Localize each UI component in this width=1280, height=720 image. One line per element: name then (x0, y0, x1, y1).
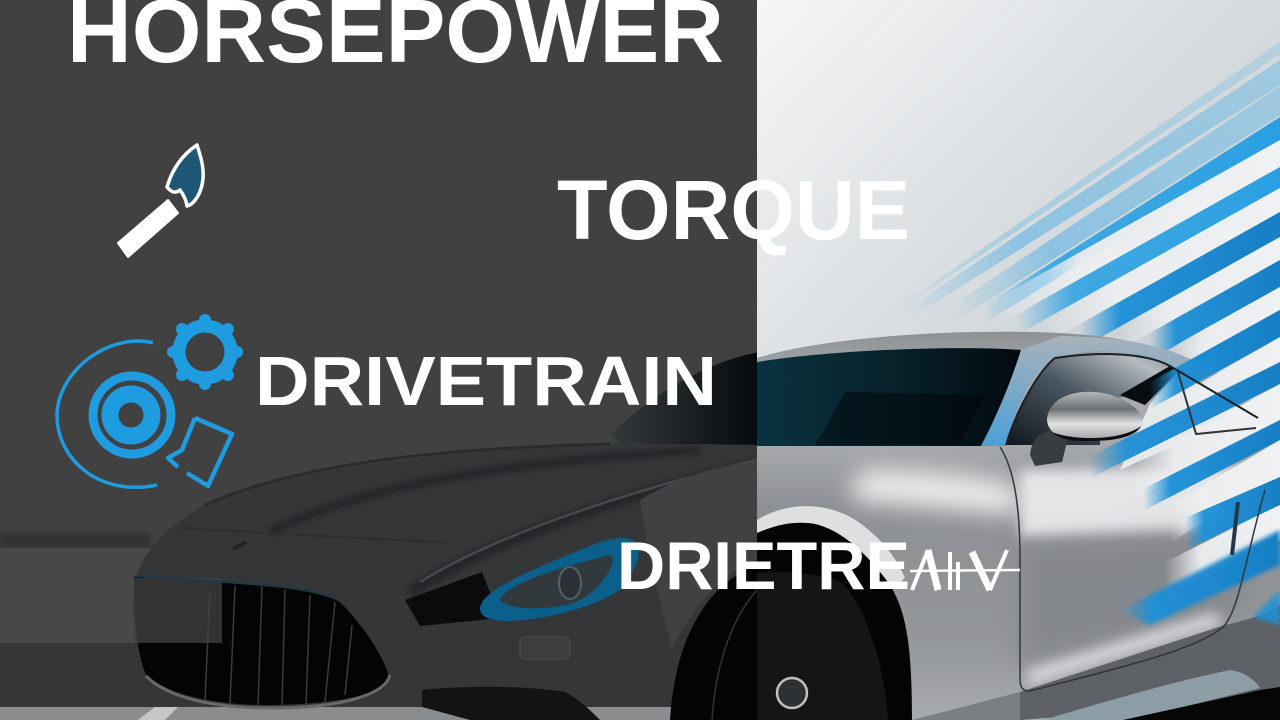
tyre and wheel (757, 523, 912, 720)
icon: hood badge (233, 542, 246, 549)
tyre (670, 565, 757, 720)
panel: left dark panel (0, 0, 757, 720)
mirror (1030, 392, 1143, 466)
gear (173, 320, 237, 384)
side window (1006, 352, 1258, 470)
panel: right light background with speed stripes (757, 0, 1280, 720)
quarter glass (1120, 378, 1238, 470)
grille (134, 576, 390, 708)
car body (757, 332, 1280, 720)
icon: brake disc and gear (57, 320, 237, 487)
illustration: car, silver half (757, 310, 1280, 720)
windshield pillar (981, 336, 1200, 446)
heading: DRIVETRAIN: DRIVETRAIN (255, 342, 717, 420)
body stripes (1006, 310, 1280, 625)
wheel arch (757, 506, 905, 582)
illustration: car, dark half (134, 352, 760, 720)
windshield (757, 348, 1021, 446)
door lines (1000, 447, 1265, 691)
heading: garbled DRIETRE label: DRIETRE (617, 528, 910, 604)
pad (168, 418, 232, 486)
icon: torch with flame (118, 145, 203, 257)
window outlines (1006, 354, 1258, 445)
outer arc (57, 341, 157, 487)
heading: TORQUE: TORQUE (557, 163, 910, 257)
disc (93, 376, 171, 454)
bumper vent (520, 637, 570, 659)
headlight (405, 538, 639, 626)
